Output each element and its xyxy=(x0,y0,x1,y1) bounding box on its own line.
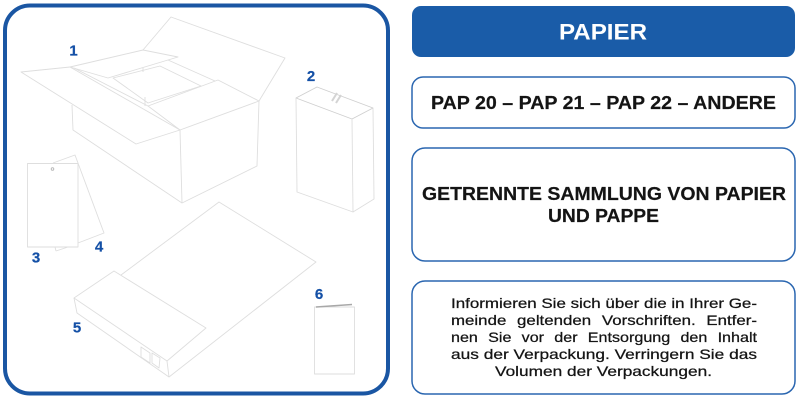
panel: instructions: nen Sie vor der Entsorgung den Inhalt xyxy=(451,329,757,345)
panel: separate collection xyxy=(412,148,795,261)
icon: paper ream box xyxy=(296,87,374,212)
icon: flat board and folder xyxy=(74,202,316,377)
heading: PAPIER xyxy=(412,6,795,57)
panel: separate collection: UND PAPPE xyxy=(548,206,659,226)
panel: instructions xyxy=(412,281,795,394)
label: 6: 6 xyxy=(315,286,323,303)
label: 1: 1 xyxy=(69,42,78,60)
panel: codes: PAP 20 – PAP 21 – PAP 22 – ANDERE xyxy=(431,93,776,113)
icon: paper sheet with hole xyxy=(28,164,78,247)
icon: folded leaflet xyxy=(314,304,354,374)
panel: instructions: meinde geltenden Vorschriften. Entfer- xyxy=(451,312,757,328)
label: 2: 2 xyxy=(307,68,315,85)
label: 5: 5 xyxy=(73,320,81,336)
panel: illustration of paper items xyxy=(5,6,388,394)
panel: instructions: Informieren Sie sich über die in Ihrer Ge- xyxy=(451,295,757,311)
icon: open cardboard box xyxy=(21,17,285,203)
panel: codes xyxy=(412,77,795,128)
label: 4: 4 xyxy=(95,238,104,256)
icon: paper sheet behind xyxy=(53,155,104,251)
panel: instructions: Volumen der Verpackungen. xyxy=(495,363,712,379)
heading: PAPIER: PAPIER xyxy=(559,20,647,44)
label: 3: 3 xyxy=(32,250,40,266)
panel: separate collection: GETRENNTE SAMMLUNG VON PAPIER xyxy=(422,184,786,204)
panel: instructions: aus der Verpackung. Verringern Sie das xyxy=(451,346,757,362)
